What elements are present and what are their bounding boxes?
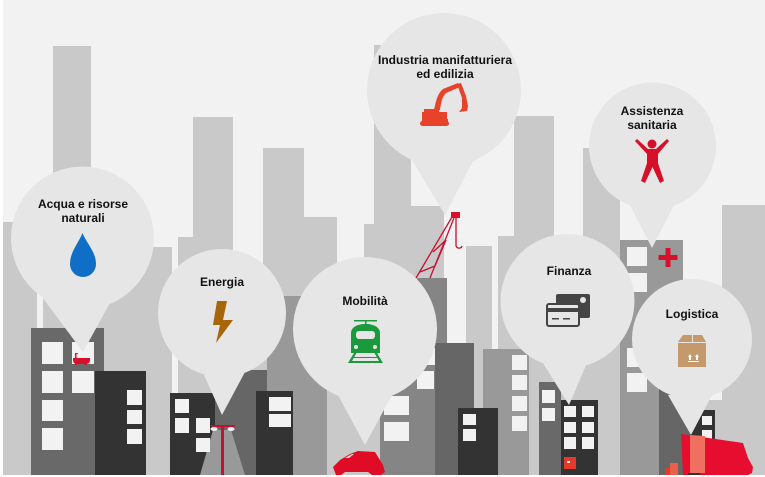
pin: Mobilità: [293, 257, 437, 445]
icon: red bathtub: [73, 353, 90, 365]
icon: credit cards: [547, 294, 590, 326]
icon: street lamp: [200, 425, 245, 475]
pin: Energia: Energia: [200, 275, 244, 289]
icon: red safe on building: [564, 457, 576, 469]
icon: lightning bolt: [213, 301, 233, 343]
foreground dark buildings: [95, 371, 715, 475]
pin: Assistenza sanitaria: sanitaria: [627, 118, 677, 132]
pin: Acqua e risorse naturali: Acqua e risorse: [38, 197, 128, 211]
pin: Logistica: Logistica: [666, 307, 719, 321]
pin: Energia: [158, 249, 286, 415]
icon: water drop: [70, 233, 96, 277]
pin: Assistenza sanitaria: [589, 82, 716, 248]
icon: red car: [333, 451, 385, 475]
icon: green train: [348, 320, 383, 363]
pin: Industria manifatturiera ed edilizia: Industria manifatturiera: [378, 53, 512, 67]
icon: red hospital cross: [658, 248, 678, 267]
pin: Acqua e risorse naturali: naturali: [61, 211, 105, 225]
pin: Assistenza sanitaria: Assistenza: [621, 104, 684, 118]
building windows: [42, 247, 712, 452]
pin: Finanza: [500, 234, 634, 405]
pin: Logistica: [632, 279, 752, 435]
icon: red construction crane: [416, 212, 462, 278]
icon: person with raised arms: [635, 139, 669, 183]
icon: excavator: [420, 83, 468, 126]
pin: Industria manifatturiera ed edilizia: ed edilizia: [416, 67, 474, 81]
icon: cardboard box: [678, 335, 706, 367]
pin: Mobilità: Mobilità: [342, 294, 388, 308]
pin: Acqua e risorse naturali: [11, 166, 154, 352]
pin: Industria manifatturiera ed edilizia: [367, 13, 521, 215]
pin: Finanza: Finanza: [547, 264, 592, 278]
icon: red delivery truck with parcels: [665, 434, 753, 475]
mid-ground buildings: [31, 240, 690, 475]
